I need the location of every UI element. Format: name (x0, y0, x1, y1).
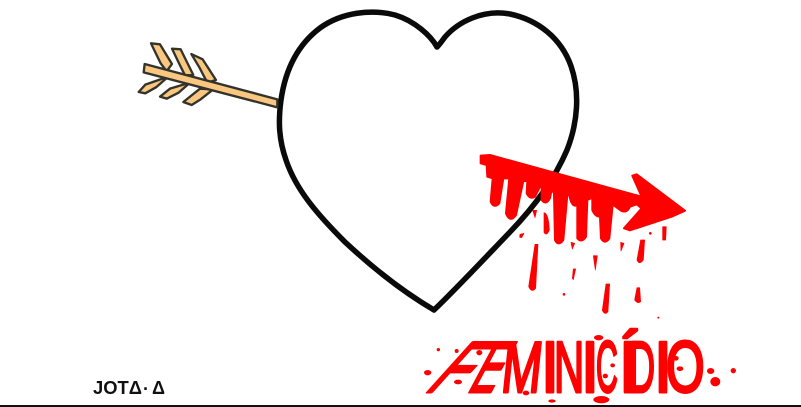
title: Feminicídio: I (541, 327, 559, 407)
title: Feminicídio: I (654, 327, 672, 407)
blood splatter around title (424, 335, 736, 403)
blood-red arrow head and dripping shaft (481, 155, 685, 318)
feather: lower right (183, 89, 213, 105)
feather: upper right (191, 54, 216, 83)
title: Feminicídio: E (458, 327, 527, 407)
feather: upper middle (172, 49, 193, 75)
artist signature: JOTΔ (93, 378, 142, 398)
shaft (144, 64, 277, 107)
title: Feminicídio: O (666, 328, 705, 407)
heart outline (279, 12, 577, 310)
feather: lower middle (160, 83, 190, 99)
title: Feminicídio: I (581, 327, 599, 407)
artist signature: · (143, 379, 149, 399)
bottom border line (0, 405, 801, 407)
arrow tail with feathers (139, 43, 277, 107)
artist signature (93, 378, 165, 399)
feather: upper left (151, 43, 172, 71)
title: Feminicídio (409, 327, 705, 407)
feather: lower left (139, 77, 168, 93)
title: Feminicídio: F (409, 327, 514, 407)
blood drops (520, 210, 666, 318)
title: Feminicídio: Í (619, 327, 637, 407)
title: Feminicídio: D (629, 327, 655, 407)
title: Feminicídio: M (498, 327, 546, 407)
artist signature: Δ (152, 378, 165, 398)
title: Feminicídio: C (596, 327, 618, 407)
title: Feminicídio: N (554, 328, 584, 407)
